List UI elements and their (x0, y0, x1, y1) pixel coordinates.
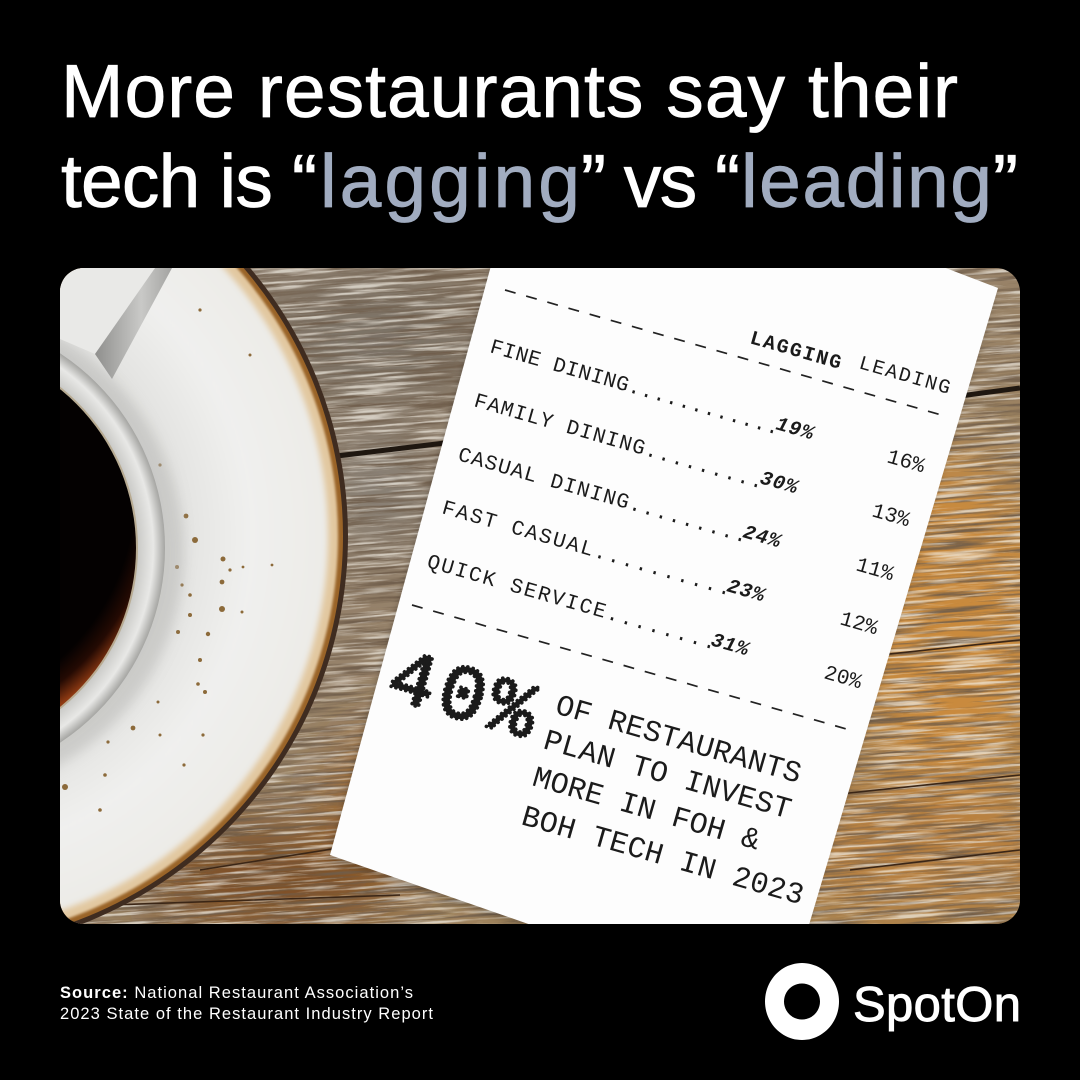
row: casual dining (455, 445, 896, 587)
logo wordmark: SpotOn (853, 978, 1021, 1032)
stat description (522, 696, 803, 903)
row: casual dining: 11% (853, 555, 896, 587)
row: quick service: QUICK SERVICE........ (424, 552, 719, 656)
row: casual dining: CASUAL DINING......... (455, 445, 750, 549)
stat description: OF RESTAURANTS (551, 690, 805, 793)
row: fast casual: FAST CASUAL.......... (439, 498, 734, 602)
row: casual dining: 24% (740, 522, 784, 554)
row: fine dining: FINE DINING............ (487, 337, 782, 441)
cup handle (60, 268, 172, 379)
plank gaps and cracks (320, 388, 1020, 458)
row: family dining: FAMILY DINING......... (471, 391, 766, 495)
row: family dining: 30% (757, 468, 801, 500)
row: fine dining: 16% (884, 447, 927, 479)
row: family dining: 13% (869, 501, 912, 533)
title: ” vs “ (581, 139, 740, 223)
column headers: LAGGING (747, 328, 844, 376)
row: fast casual: 12% (837, 609, 880, 641)
source note (60, 984, 433, 1023)
receipt paper (328, 262, 998, 939)
row: quick service (424, 552, 864, 695)
big stat 40%: 40% (377, 635, 546, 761)
SpotOn logo (765, 963, 1021, 1040)
row: fast casual: 23% (724, 576, 768, 608)
title: More restaurants say their (61, 49, 958, 133)
title: tech is “ (61, 139, 317, 223)
receipt top dashed line (505, 290, 945, 416)
title: lagging (320, 139, 580, 223)
saucer (60, 268, 348, 924)
source note: 2023 State of the Restaurant Industry Report (60, 1005, 433, 1023)
stat description: BOH TECH IN 2023 (517, 801, 807, 914)
source note: Source: National Restaurant Association’s (60, 984, 413, 1002)
title: ” (993, 139, 1018, 223)
coffee cup (60, 268, 188, 768)
receipt bottom dashed line (412, 605, 850, 730)
row: fine dining: 19% (773, 414, 817, 446)
row: family dining (471, 391, 912, 533)
stat description: PLAN TO INVEST (539, 725, 795, 828)
wooden table (60, 268, 1020, 924)
row: fine dining (487, 337, 927, 479)
column headers: LEADING (856, 353, 953, 401)
row: quick service: 31% (708, 630, 752, 662)
logo ring (765, 963, 839, 1040)
column headers (751, 330, 950, 393)
saucer speckles (62, 308, 273, 812)
row: quick service: 20% (821, 663, 864, 695)
title (61, 49, 1018, 223)
title: leading (741, 139, 992, 223)
row: fast casual (439, 498, 880, 641)
stat description: MORE IN FOH & (528, 762, 764, 859)
photo panel: coffee and receipt on wood (60, 268, 1020, 924)
